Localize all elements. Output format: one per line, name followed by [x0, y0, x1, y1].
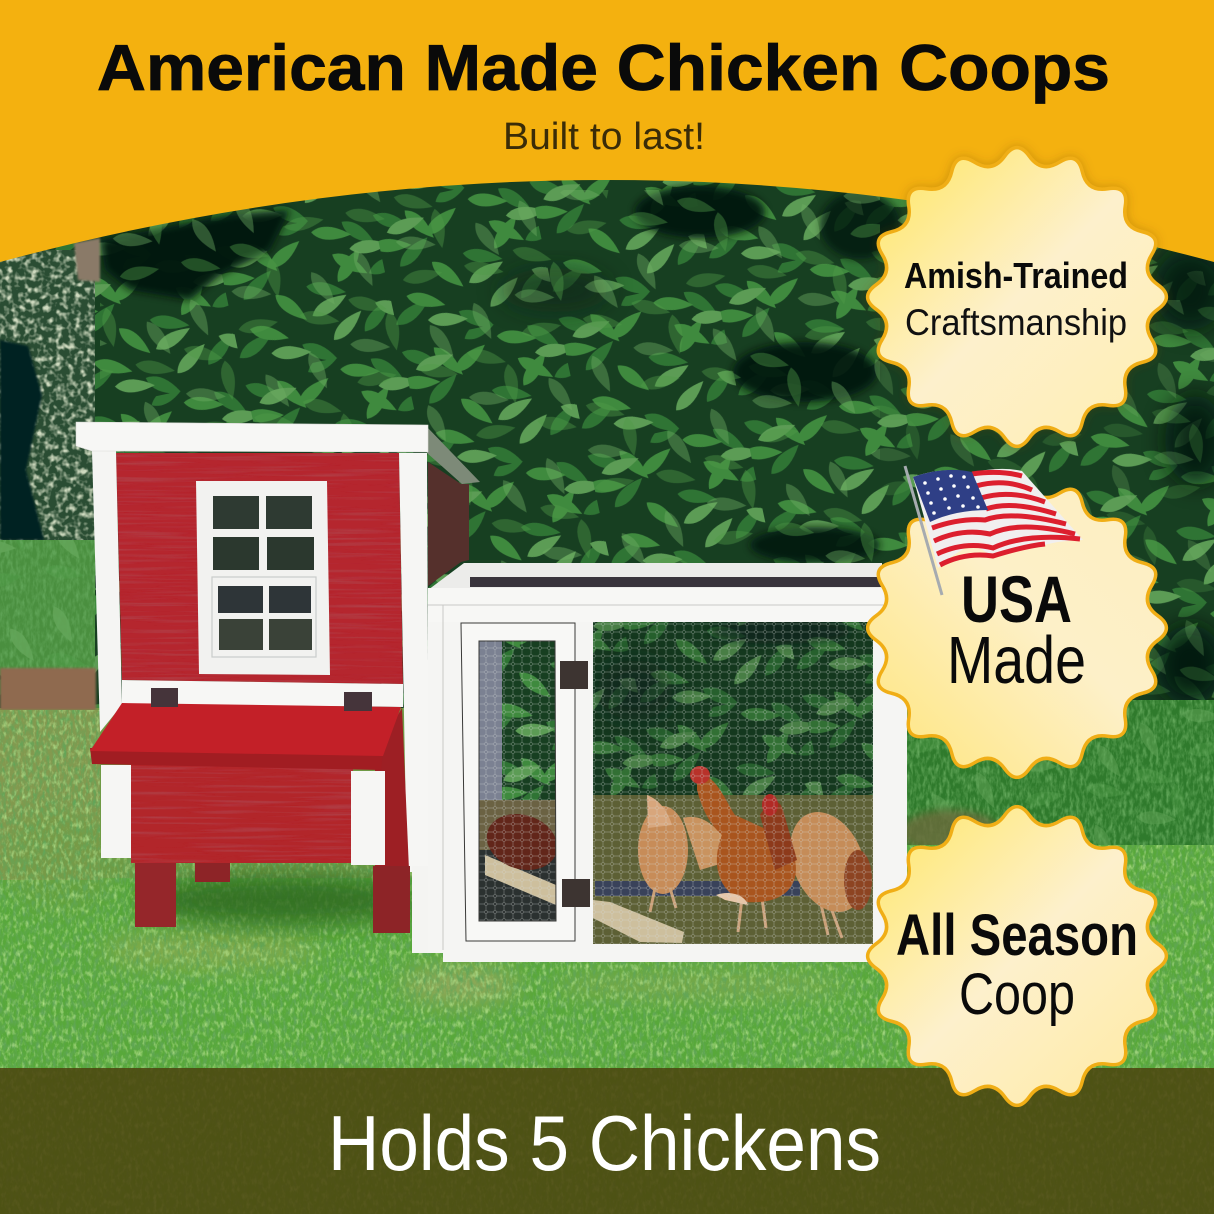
beam seam line: [428, 605, 886, 950]
door hinge top: [560, 661, 588, 689]
window: [196, 481, 330, 675]
leg back: [195, 863, 230, 882]
white band under wall: [122, 680, 403, 707]
chicken run: [428, 563, 907, 962]
right white post: [399, 453, 429, 872]
run white backing: [428, 590, 907, 962]
header banner: [0, 0, 1214, 262]
door interior: [480, 642, 556, 920]
badge: USA Made: Made: [947, 623, 1086, 698]
title: American Made Chicken Coops: [97, 31, 1110, 104]
door frame: [461, 623, 575, 941]
badge: Amish-Trained Craftsmanship: Amish-Trained: [904, 255, 1128, 296]
background: grass lawn: [0, 668, 1214, 1214]
leg front left: [135, 863, 176, 927]
run front beam: [428, 588, 886, 622]
badge: All Season Coop: All Season: [896, 903, 1138, 968]
roof fascia: [76, 422, 428, 452]
door hinge bottom: [562, 879, 590, 907]
chicken coop house: [76, 422, 480, 953]
run top wire strip: [428, 563, 882, 590]
left white post: [92, 451, 122, 732]
house rear side panel: [428, 462, 469, 586]
badge: All Season Coop: [868, 807, 1166, 1105]
nest white corner left: [101, 765, 131, 858]
lower post: [412, 866, 430, 953]
badge: Amish-Trained Craftsmanship: Craftsmanship: [905, 302, 1127, 343]
red wall: [116, 453, 403, 684]
nest box lid edge: [90, 748, 383, 770]
badge: All Season Coop: Coop: [959, 962, 1075, 1027]
roof side: [427, 427, 480, 484]
hens in run: [638, 766, 880, 938]
badge: USA Made: USA: [961, 562, 1072, 636]
footer text: Holds 5 Chickens: [328, 1099, 881, 1187]
nest box lid: [90, 703, 401, 756]
subtitle: Built to last!: [503, 116, 705, 158]
nest white corner right: [351, 771, 385, 865]
background: foliage: [0, 170, 1214, 870]
badge: Amish-Trained Craftsmanship: [868, 148, 1166, 446]
hinge right: [344, 692, 372, 711]
leg front right: [373, 866, 410, 933]
footer band: [0, 1068, 1214, 1214]
icon: American flag: [905, 466, 1083, 595]
badge: USA Made: [868, 466, 1166, 777]
run interior background: [593, 620, 880, 945]
hinge left: [151, 688, 178, 707]
nest box side: [375, 708, 409, 870]
nest box front: [131, 762, 353, 863]
